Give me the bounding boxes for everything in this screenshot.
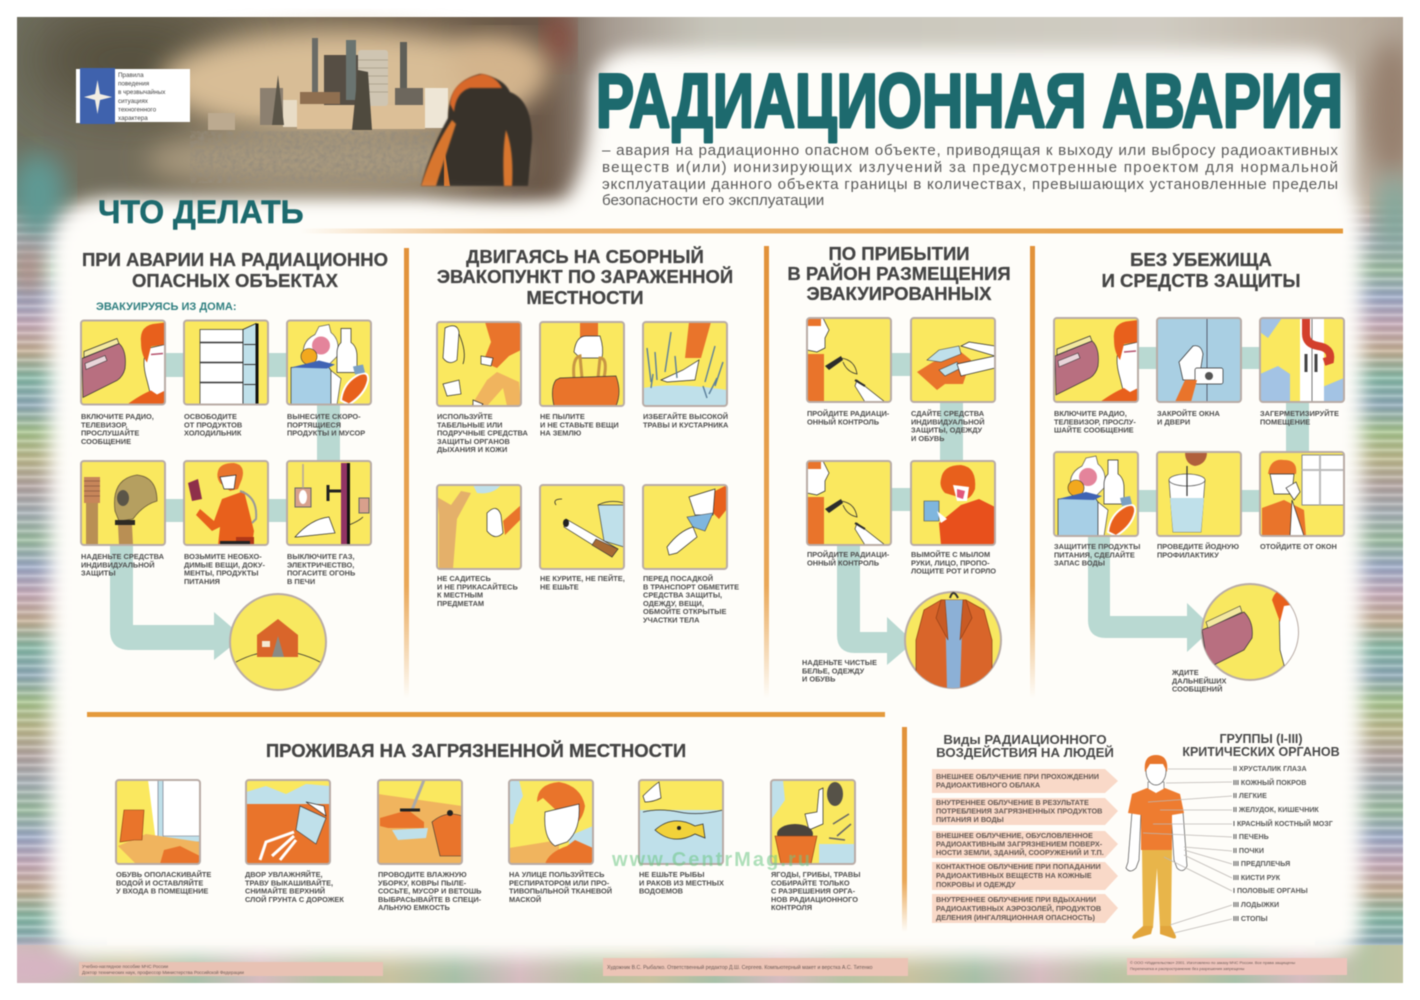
caption: И НЕ ПРИКАСАЙТЕСЬ: [437, 582, 518, 591]
caption: НЕ ПЫЛИТЕ: [540, 412, 585, 421]
caption: ТЕЛЕВИЗОР,: [81, 420, 127, 429]
caption: ЗАЩИТЫ, ОДЕЖДУ: [911, 426, 983, 435]
panel: do not smoke: [540, 485, 624, 569]
definition paragraph: – авария на радиационно опасном объекте, приводящая к выходу или выбросу радиоактивных: [602, 142, 1338, 159]
exposure type 4: КОНТАКТНОЕ ОБЛУЧЕНИЕ ПРИ ПОПАДАНИИ: [936, 862, 1101, 871]
icon: clean jacket in circle: [905, 592, 1001, 690]
caption: РУКИ, ЛИЦО, ПРОПО-: [911, 558, 990, 567]
caption: ЛОЩИТЕ РОТ И ГОРЛО: [911, 567, 996, 576]
exposure type 5: ДЕЛЕНИЯ (ИНГАЛЯЦИОННАЯ ОПАСНОСТЬ): [936, 913, 1096, 922]
section heading: what to do: ЧТО ДЕЛАТЬ: [98, 194, 304, 230]
caption: ЗАГЕРМЕТИЗИРУЙТЕ: [1260, 409, 1339, 418]
caption: ОННЫЙ КОНТРОЛЬ: [807, 417, 880, 426]
flow connectors: [1137, 347, 1309, 512]
caption: НА УЛИЦЕ ПОЛЬЗУЙТЕСЬ: [509, 870, 605, 879]
organ labels: III КИСТИ РУК: [1233, 874, 1281, 882]
column heading: В РАЙОН РАЗМЕЩЕНИЯ: [787, 263, 1011, 284]
column heading: ПО ПРИБЫТИИ: [828, 243, 970, 264]
exposure type 5: [932, 894, 1118, 923]
credit strip right: Перепечатка и распространение без разрешения запрещены: [1130, 966, 1244, 971]
caption: ПОРТЯЩИЕСЯ: [287, 420, 341, 429]
panel: second control: [807, 461, 891, 545]
organ labels: II ЛЕГКИЕ: [1233, 792, 1267, 800]
caption: ТРАВЫ И КУСТАРНИКА: [643, 420, 729, 429]
credit strip right: [1127, 958, 1347, 975]
caption: СЛОЙ ГРУНТА С ДОРОЖЕК: [245, 895, 344, 904]
caption: ПРОВОДИТЕ ВЛАЖНУЮ: [378, 870, 467, 879]
arrow to radio: [1088, 536, 1213, 652]
caption: ЗАЩИТЫ: [81, 569, 116, 578]
caption: ВЫКЛЮЧИТЕ ГАЗ,: [287, 552, 355, 561]
column heading: МЕСТНОСТИ: [526, 287, 644, 308]
caption: ОННЫЙ КОНТРОЛЬ: [807, 558, 880, 567]
panel: do not eat fish: [639, 780, 723, 864]
exposure type 2: [932, 798, 1118, 825]
panel: perishables: [287, 320, 371, 404]
caption: ВЫНЕСИТЕ СКОРО-: [287, 412, 361, 421]
organ labels: II ХРУСТАЛИК ГЛАЗА: [1233, 765, 1307, 773]
caption: ДЫХАНИЯ И КОЖИ: [437, 445, 507, 454]
caption: ПРЕДМЕТАМ: [437, 599, 484, 608]
organ labels: II ПЕЧЕНЬ: [1233, 833, 1269, 841]
caption: ОБУВЬ ОПОЛАСКИВАЙТЕ: [116, 870, 211, 879]
caption: НОВ РАДИАЦИОННОГО: [771, 895, 858, 904]
caption: ИНДИВИДУАЛЬНОЙ: [911, 417, 985, 426]
caption: У ВХОДА В ПОМЕЩЕНИЕ: [116, 887, 208, 896]
watermark: www.CentrMag.ru: [611, 849, 810, 871]
caption: СОБИРАЙТЕ ТОЛЬКО: [771, 878, 850, 887]
caption: И ДВЕРИ: [1157, 417, 1190, 426]
exposure type 3: [932, 831, 1118, 858]
panel: radio: [81, 320, 165, 404]
panel: berries: [771, 780, 855, 864]
caption: К МЕСТНЫМ: [437, 591, 483, 600]
panel: iodine prophylaxis: [1157, 452, 1241, 536]
exposure type 4: [932, 862, 1118, 890]
caption: ВКЛЮЧИТЕ РАДИО,: [1054, 409, 1127, 418]
exposure type 4: РАДИОАКТИВНЫХ ВЕЩЕСТВ НА КОЖНЫЕ: [936, 871, 1092, 880]
caption: ИНДИВИДУАЛЬНОЙ: [81, 560, 155, 569]
caption: ЯГОДЫ, ГРИБЫ, ТРАВЫ: [771, 870, 860, 879]
caption: НАДЕНЬТЕ СРЕДСТВА: [81, 552, 165, 561]
credit strip right: © ООО «Издательство» 2001. Изготовлено по заказу МЧС России. Все права защищены: [1130, 960, 1295, 965]
caption: ОСВОБОДИТЕ: [184, 412, 237, 421]
header photo: figure in protective suit: [421, 74, 532, 186]
exposure type 1: ВНЕШНЕЕ ОБЛУЧЕНИЕ ПРИ ПРОХОЖДЕНИИ: [936, 772, 1099, 781]
panel: tall grass: [643, 322, 727, 406]
heading: ГРУППЫ (I-III): [1219, 732, 1303, 746]
panel: yard watering: [246, 780, 330, 864]
caption: ЭЛЕКТРИЧЕСТВО,: [287, 560, 354, 569]
caption: ТРАВУ ВЫКАШИВАЙТЕ,: [245, 878, 333, 887]
column heading: И СРЕДСТВ ЗАЩИТЫ: [1102, 270, 1300, 291]
caption: СООБЩЕНИЕ: [81, 437, 131, 446]
caption: ШАЙТЕ СООБЩЕНИЕ: [1054, 426, 1134, 435]
panel: close windows: [1157, 318, 1241, 402]
caption: УЧАСТКИ ТЕЛА: [643, 616, 700, 624]
column heading: ЭВАКОПУНКТ ПО ЗАРАЖЕННОЙ: [437, 266, 733, 287]
credit strip left: [79, 962, 383, 976]
caption: ПОГАСИТЕ ОГОНЬ: [287, 569, 356, 578]
organ labels: III ЛОДЫЖКИ: [1233, 901, 1279, 909]
heading: Виды РАДИАЦИОННОГО: [943, 732, 1107, 747]
panel: critical organ groups: [1126, 732, 1340, 939]
exposure type 2: ВНУТРЕННЕЕ ОБЛУЧЕНИЕ В РЕЗУЛЬТАТЕ: [936, 798, 1089, 807]
logo block: [76, 68, 190, 124]
heading: ВОЗДЕЙСТВИЯ НА ЛЮДЕЙ: [936, 745, 1114, 760]
caption: ВКЛЮЧИТЕ РАДИО,: [81, 412, 154, 421]
caption: ПИТАНИЯ, СДЕЛАЙТЕ: [1054, 550, 1135, 559]
column 1: during accident: [81, 249, 388, 690]
organ labels: I КРАСНЫЙ КОСТНЫЙ МОЗГ: [1233, 819, 1333, 828]
definition paragraph: веществ и(или) ионизирующих излучений за предусмотренные проектом для нормальной: [602, 159, 1338, 176]
leader lines: [1143, 769, 1232, 933]
credit strip left: Доктор технических наук, профессор Министерства Российской Федерации: [82, 969, 244, 975]
logo caption: характера: [118, 115, 148, 122]
caption: ТЕЛЕВИЗОР, ПРОСЛУ-: [1054, 417, 1136, 426]
credit strip center: [603, 958, 908, 976]
organ labels: II ПОЧКИ: [1233, 847, 1264, 855]
heading: КРИТИЧЕСКИХ ОРГАНОВ: [1182, 745, 1340, 759]
exposure type 1: РАДИОАКТИВНОГО ОБЛАКА: [936, 780, 1041, 790]
exposure type 3: РАДИОАКТИВНЫМ ЗАГРЯЗНЕНИЕМ ПОВЕРХ-: [936, 840, 1103, 848]
definition paragraph: эксплуатации данного объекта границы в количествах, превышающих установленные пределы: [602, 176, 1338, 193]
caption: ЖДИТЕ: [1171, 668, 1199, 677]
panel: hand in clothes: [911, 318, 995, 402]
panel: switches: [287, 461, 371, 545]
caption: ДАЛЬНЕЙШИХ: [1172, 676, 1227, 685]
organ labels: III КОЖНЫЙ ПОКРОВ: [1233, 778, 1306, 787]
panel: wash and gargle: [911, 461, 995, 545]
caption: ТИВОПЫЛЬНОЙ ТКАНЕВОЙ: [509, 887, 612, 896]
column 2: moving over contaminated area: [437, 246, 739, 624]
caption: ПРОВЕДИТЕ ЙОДНУЮ: [1157, 542, 1239, 551]
exposure type 2: ПОТРЕБЛЕНИЯ ЗАГРЯЗНЕННЫХ ПРОДУКТОВ: [936, 806, 1102, 816]
logo caption: техногенного: [118, 106, 157, 113]
caption: ПОДРУЧНЫЕ СРЕДСТВА: [437, 429, 529, 438]
subheading: ЭВАКУИРУЯСЬ ИЗ ДОМА:: [96, 301, 236, 313]
caption: В ТРАНСПОРТ ОБМЕТИТЕ: [643, 582, 739, 591]
caption: ВОДОЕМОВ: [639, 887, 683, 896]
caption: НЕ САДИТЕСЬ: [437, 574, 491, 583]
column heading: ПРИ АВАРИИ НА РАДИАЦИОННО: [82, 249, 388, 270]
exposure type 1: [932, 769, 1118, 793]
caption: НЕ ЕШЬТЕ РЫБЫ: [639, 870, 704, 879]
panel: radiation control: [807, 318, 891, 402]
caption: ПЕРЕД ПОСАДКОЙ: [643, 574, 713, 583]
caption: СДАЙТЕ СРЕДСТВА: [911, 409, 985, 418]
organ labels: I ПОЛОВЫЕ ОРГАНЫ: [1233, 887, 1308, 895]
section: living in contaminated area: [116, 740, 860, 912]
panel: wet cleaning: [378, 780, 462, 864]
caption: ЗАЩИТИТЕ ПРОДУКТЫ: [1054, 542, 1140, 551]
caption: ВОЗЬМИТЕ НЕОБХО-: [184, 552, 262, 561]
panel: respirator: [509, 780, 593, 864]
caption: НЕ КУРИТЕ, НЕ ПЕЙТЕ,: [540, 574, 625, 583]
logo caption: ситуациях: [118, 98, 149, 105]
caption: КОНТРОЛЯ: [771, 903, 812, 912]
icon: emblem star: [84, 80, 112, 114]
caption: СОСЬТЕ, МУСОР И ВЕТОШЬ: [378, 887, 482, 896]
caption: ДИМЫЕ ВЕЩИ, ДОКУ-: [184, 560, 265, 569]
flow connectors: [165, 353, 340, 522]
caption: ПРОСЛУШАЙТЕ: [81, 429, 139, 438]
human figure: [1126, 755, 1187, 939]
definition paragraph: [602, 142, 1338, 209]
arrow to shelter: [110, 545, 243, 660]
caption: ОДЕЖДУ, ВЕЩИ,: [643, 599, 704, 608]
panel: gas mask: [81, 461, 165, 545]
caption: И РАКОВ ИЗ МЕСТНЫХ: [639, 878, 724, 887]
caption: ХОЛОДИЛЬНИК: [184, 429, 242, 438]
panel: protect food: [1054, 452, 1138, 536]
definition paragraph: безопасности его эксплуатации: [602, 192, 824, 209]
caption: НЕ ЕШЬТЕ: [540, 582, 579, 591]
caption: НАДЕНЬТЕ ЧИСТЫЕ: [802, 658, 877, 667]
caption: ВЫМОЙТЕ С МЫЛОМ: [911, 550, 990, 559]
caption: ЗАПАС ВОДЫ: [1054, 559, 1105, 568]
caption: И НЕ СТАВЬТЕ ВЕЩИ: [540, 420, 619, 429]
panel: fridge: [184, 320, 268, 404]
caption: СРЕДСТВА ЗАЩИТЫ,: [643, 591, 722, 600]
panel: boots: [116, 780, 200, 864]
caption: С РАЗРЕШЕНИЯ ОРГА-: [771, 887, 856, 896]
logo caption: Правила: [118, 72, 144, 79]
caption: МАСКОЙ: [509, 895, 541, 904]
caption: И ОБУВЬ: [911, 434, 945, 443]
credit strip left: Учебно-наглядное пособие МЧС России: [82, 964, 168, 969]
caption: ПРОЙДИТЕ РАДИАЦИ-: [807, 409, 890, 418]
exposure type 3: ВНЕШНЕЕ ОБЛУЧЕНИЕ, ОБУСЛОВЛЕННОЕ: [936, 831, 1093, 840]
caption: ВЫБРАСЫВАЙТЕ В СПЕЦИ-: [378, 895, 482, 904]
flow connectors: [891, 353, 963, 511]
exposure type 3: НОСТИ ЗЕМЛИ, ЗДАНИЙ, СООРУЖЕНИЙ И Т.П.: [936, 848, 1104, 857]
section heading: ПРОЖИВАЯ НА ЗАГРЯЗНЕННОЙ МЕСТНОСТИ: [266, 740, 686, 761]
caption: ПРОЙДИТЕ РАДИАЦИ-: [807, 550, 890, 559]
organ labels: III ПРЕДПЛЕЧЬЯ: [1233, 860, 1290, 868]
column heading: ОПАСНЫХ ОБЪЕКТАХ: [132, 270, 339, 291]
panel: bag: [540, 322, 624, 406]
caption: ЗАЩИТЫ ОРГАНОВ: [437, 437, 510, 446]
caption: НА ЗЕМЛЮ: [540, 429, 582, 438]
caption: РЕСПИРАТОРОМ ИЛИ ПРО-: [509, 878, 610, 887]
column heading: ДВИГАЯСЬ НА СБОРНЫЙ: [466, 246, 704, 267]
column 4: without shelter: [1054, 249, 1344, 694]
credit strip center: Художник В.С. Рыбалко. Ответственный редактор Д.Ш. Сергеев. Компьютерный макет и верстка А.С. Титенко: [607, 964, 873, 971]
caption: ПОМЕЩЕНИЕ: [1260, 417, 1310, 426]
caption: И ОБУВЬ: [802, 675, 836, 684]
panel: documents: [184, 461, 268, 545]
icon: tent in circle: [230, 594, 326, 690]
caption: ПРОДУКТЫ И МУСОР: [287, 429, 365, 438]
caption: МЕНТЫ, ПРОДУКТЫ: [184, 569, 258, 578]
caption: ЗАКРОЙТЕ ОКНА: [1157, 409, 1220, 418]
organ labels: II ЖЕЛУДОК, КИШЕЧНИК: [1233, 806, 1319, 814]
exposure type 5: ВНУТРЕННЕЕ ОБЛУЧЕНИЕ ПРИ ВДЫХАНИИ: [936, 895, 1096, 904]
caption: ИЗБЕГАЙТЕ ВЫСОКОЙ: [643, 412, 728, 421]
caption: В ПЕЧИ: [287, 577, 315, 586]
arrow to clean clothes: [837, 544, 914, 665]
caption: ПРОФИЛАКТИКУ: [1157, 550, 1219, 559]
caption: ВОДОЙ И ОСТАВЛЯЙТЕ: [116, 878, 203, 887]
icon: radio in circle: [1202, 584, 1300, 680]
panel: seal the room: [1260, 318, 1344, 402]
column heading: ЭВАКУИРОВАННЫХ: [807, 283, 992, 304]
header photo: power plant: [145, 30, 550, 192]
caption: СНИМАЙТЕ ВЕРХНИЙ: [245, 887, 325, 896]
caption: ОБМОЙТЕ ОТКРЫТЫЕ: [643, 607, 726, 616]
caption: БЕЛЬЕ, ОДЕЖДУ: [802, 666, 865, 675]
panel: radio: [1054, 318, 1138, 402]
organ labels: III СТОПЫ: [1233, 915, 1268, 923]
caption: ПИТАНИЯ: [184, 577, 220, 586]
caption: ДВОР УВЛАЖНЯЙТЕ,: [245, 870, 323, 879]
logo caption: поведения: [118, 81, 149, 88]
caption: ТАБЕЛЬНЫЕ ИЛИ: [437, 420, 502, 429]
panel: do not sit: [437, 485, 521, 569]
panel: away from windows: [1260, 452, 1344, 536]
exposure type 4: ПОКРОВЫ И ОДЕЖДУ: [936, 880, 1016, 889]
panel: wash hands: [643, 485, 727, 569]
caption: УБОРКУ, КОВРЫ ПЫЛЕ-: [378, 878, 467, 887]
panel: types of radiation exposure: [932, 732, 1118, 923]
panel: protective means: [437, 322, 521, 406]
logo caption: в чрезвычайных: [118, 88, 166, 96]
exposure type 2: ПИТАНИЯ И ВОДЫ: [936, 815, 1004, 824]
caption: СООБЩЕНИЙ: [1172, 685, 1222, 694]
caption: ОТ ПРОДУКТОВ: [184, 420, 242, 429]
caption: АЛЬНУЮ ЕМКОСТЬ: [378, 903, 451, 912]
exposure type 5: РАДИОАКТИВНЫХ АЭРОЗОЛЕЙ, ПРОДУКТОВ: [936, 904, 1101, 913]
column 3: on arrival: [787, 243, 1011, 690]
column heading: БЕЗ УБЕЖИЩА: [1130, 249, 1272, 270]
caption: ИСПОЛЬЗУЙТЕ: [437, 412, 493, 421]
caption: ОТОЙДИТЕ ОТ ОКОН: [1260, 542, 1337, 551]
